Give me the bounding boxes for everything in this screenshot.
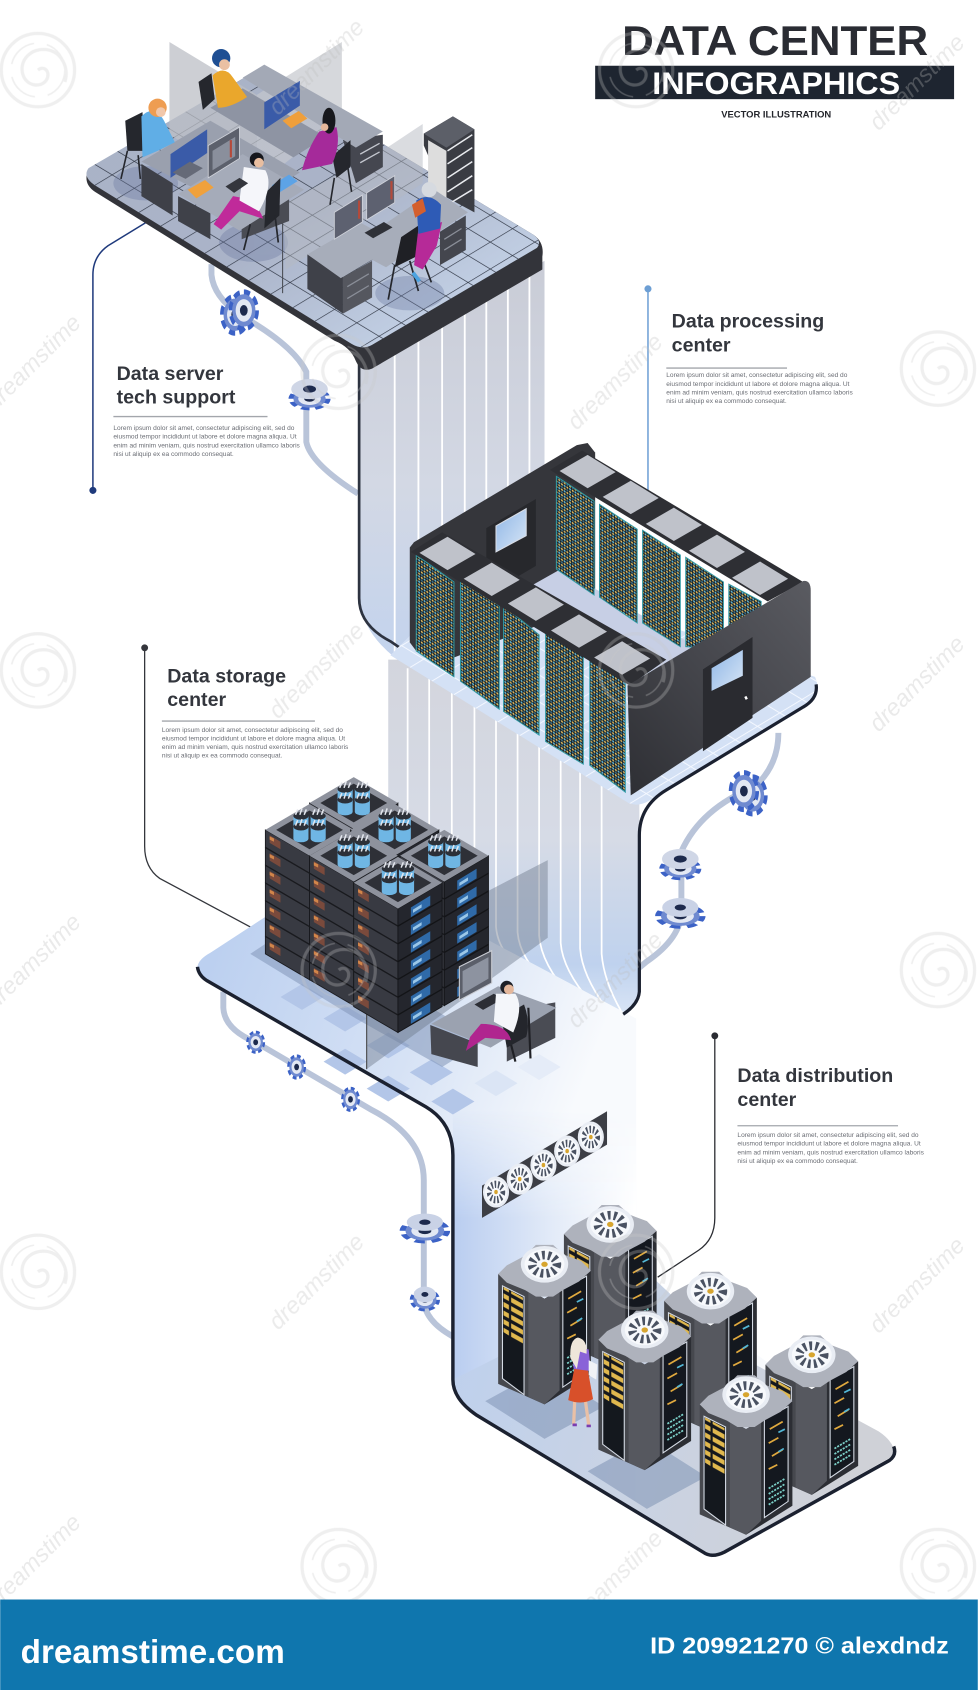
text: data distribution center: eiusmod tempor incididunt ut labore et dolore magna aliqua. Ut bbox=[737, 1141, 921, 1148]
text: data server tech support: eiusmod tempor incididunt ut labore et dolore magna aliqua. Ut bbox=[113, 434, 297, 441]
person blue bbox=[121, 99, 175, 179]
back partition right bbox=[283, 124, 423, 269]
monitor blue bbox=[171, 129, 207, 179]
processing room bbox=[390, 443, 817, 1014]
text: data processing center: center bbox=[672, 334, 731, 356]
desk back middle bbox=[210, 88, 326, 157]
fan wall panel bbox=[482, 1111, 607, 1218]
front row panels bbox=[416, 555, 625, 792]
text: data distribution center: nisi ut aliquip ex ea commodo consequat. bbox=[737, 1158, 858, 1165]
text: data server tech support: nisi ut aliquip ex ea commodo consequat. bbox=[113, 451, 234, 458]
shadow under storage racks bbox=[250, 927, 485, 1067]
storage racks bbox=[265, 777, 488, 1033]
gear fittings on pipes bbox=[224, 294, 764, 1309]
desk and operator: storage bbox=[430, 951, 556, 1067]
text: data storage center bbox=[162, 665, 349, 760]
ribbon: processing to storage bbox=[388, 660, 639, 1019]
glass partitions bbox=[169, 42, 342, 185]
filing cabinet bbox=[424, 116, 474, 212]
text: data storage center: Data storage bbox=[167, 665, 286, 687]
leader line: data server bbox=[90, 222, 147, 493]
leader line: data processing bbox=[645, 286, 651, 507]
rear wall bbox=[410, 443, 595, 657]
watermark words: dreamstime bbox=[864, 631, 970, 737]
text: data storage center: Lorem ipsum dolor sit amet, consectetur adipiscing elit, sed do bbox=[162, 727, 343, 734]
watermark words: dreamstime bbox=[563, 329, 669, 435]
title block bbox=[595, 17, 954, 119]
platform edge line bbox=[623, 684, 816, 1014]
footer bar bbox=[0, 1599, 978, 1690]
person yellow bbox=[199, 49, 247, 110]
rear door window bbox=[496, 509, 526, 552]
shadow under cabinets bbox=[485, 1369, 706, 1509]
leader line: data storage bbox=[142, 645, 250, 927]
monitors right bbox=[334, 176, 395, 239]
watermark words: dreamstime bbox=[563, 1526, 669, 1632]
rear door bbox=[486, 499, 536, 595]
server cabinets front bbox=[598, 1311, 792, 1535]
right wall bbox=[627, 581, 811, 795]
back row panels bbox=[556, 476, 761, 649]
watermark words: dreamstime bbox=[864, 30, 970, 136]
title block: DATA CENTER bbox=[622, 17, 928, 64]
text: data distribution center: center bbox=[737, 1089, 797, 1111]
text: data distribution center bbox=[737, 1065, 925, 1165]
pipe: processing to storage bbox=[621, 733, 778, 983]
title block: INFOGRAPHICS bbox=[652, 66, 900, 101]
text: data server tech support bbox=[113, 363, 301, 458]
text: data server tech support: Lorem ipsum dolor sit amet, consectetur adipiscing elit, sed do bbox=[113, 425, 295, 432]
text: data processing center bbox=[666, 311, 853, 405]
right door bbox=[703, 637, 753, 751]
desk left bbox=[141, 121, 300, 216]
text: data distribution center: enim ad minim veniam, quis nostrud exercitation ullamco laboris bbox=[737, 1149, 925, 1156]
watermark words: dreamstime bbox=[264, 15, 370, 121]
pipe: tech support to ribbon bbox=[211, 264, 358, 494]
watermark words: dreamstime bbox=[264, 618, 370, 724]
text: data server tech support: enim ad minim veniam, quis nostrud exercitation ullamco laboris bbox=[113, 442, 301, 449]
text: data storage center: center bbox=[167, 689, 227, 711]
text: data storage center: nisi ut aliquip ex ea commodo consequat. bbox=[162, 753, 282, 760]
leader line: data distribution bbox=[658, 1033, 718, 1277]
person grey hair bbox=[388, 182, 442, 300]
text: data processing center: enim ad minim veniam, quis nostrud exercitation ullamco laboris bbox=[666, 389, 853, 396]
text: data distribution center: Data distribution bbox=[737, 1065, 893, 1087]
glass partition: storage bbox=[367, 860, 548, 1069]
monitor blue back bbox=[264, 81, 300, 129]
watermark words: dreamstime bbox=[864, 1233, 970, 1339]
orange folder bbox=[188, 180, 214, 198]
platform edge: storage and distribution bbox=[197, 967, 895, 1555]
text: data processing center: Lorem ipsum dolor sit amet, consectetur adipiscing elit, sed do bbox=[666, 372, 848, 379]
text: data server tech support: Data server bbox=[117, 363, 224, 385]
floor tiles: storage checker bbox=[280, 984, 561, 1114]
storage floor and distribution column bbox=[197, 878, 895, 1557]
front row tops bbox=[411, 532, 666, 685]
back row tops bbox=[550, 451, 803, 601]
desk back right bbox=[243, 65, 383, 183]
orange folder back bbox=[283, 111, 307, 128]
pipe: storage to distribution bbox=[223, 992, 453, 1336]
blue folder bbox=[272, 175, 298, 192]
text: data processing center: Data processing bbox=[672, 311, 824, 333]
title block: VECTOR ILLUSTRATION bbox=[721, 109, 831, 119]
desk center bbox=[178, 154, 304, 239]
server cabinets bbox=[498, 1205, 858, 1495]
floor shadows bbox=[113, 166, 444, 310]
watermark words: dreamstime bbox=[563, 928, 669, 1034]
footer id text: ID 209921270 © alexdndz bbox=[650, 1632, 949, 1658]
office scene bbox=[121, 42, 474, 314]
person white shirt bbox=[214, 153, 280, 250]
text: data server tech support: tech support bbox=[117, 387, 236, 409]
ribbon: office to processing bbox=[359, 261, 545, 668]
office floor bbox=[86, 72, 543, 370]
text: data storage center: enim ad minim veniam, quis nostrud exercitation ullamco laboris bbox=[162, 744, 349, 751]
person pink bbox=[302, 108, 352, 205]
monitor center bbox=[208, 127, 239, 178]
aisle bbox=[528, 569, 744, 706]
footer logo text: dreamstime.com bbox=[21, 1634, 285, 1671]
text: data processing center: eiusmod tempor incididunt ut labore et dolore magna aliqua. Ut bbox=[666, 381, 850, 388]
watermark words: dreamstime bbox=[264, 1229, 370, 1335]
text: data storage center: eiusmod tempor incididunt ut labore et dolore magna aliqua. Ut bbox=[162, 735, 345, 742]
room platform bbox=[390, 604, 817, 805]
technician woman bbox=[568, 1338, 597, 1426]
right door window bbox=[712, 650, 743, 691]
text: data processing center: nisi ut aliquip ex ea commodo consequat. bbox=[666, 398, 787, 405]
text: data distribution center: Lorem ipsum dolor sit amet, consectetur adipiscing elit, sed do bbox=[737, 1132, 919, 1139]
glass post bbox=[282, 205, 284, 293]
desk right bbox=[307, 190, 468, 314]
